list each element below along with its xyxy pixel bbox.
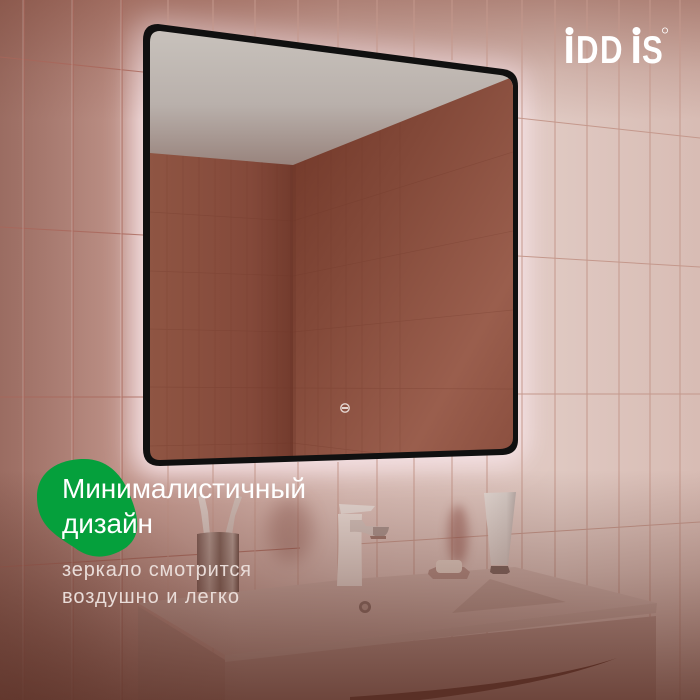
toothbrushes and cup xyxy=(197,494,242,592)
mirror xyxy=(143,24,518,466)
mirror reflection xyxy=(150,25,515,465)
cup xyxy=(197,532,239,592)
right toothbrush xyxy=(225,495,242,535)
logo: iddis: D xyxy=(576,29,599,72)
bottom shading xyxy=(0,470,700,700)
subheading xyxy=(62,559,251,608)
counter top xyxy=(138,567,657,655)
faucet xyxy=(337,504,389,586)
heading: дизайн xyxy=(62,508,153,539)
shadow behind cup xyxy=(268,498,312,562)
logo: iddis xyxy=(564,27,668,72)
logo: iddis: S xyxy=(642,29,663,72)
heading xyxy=(62,473,306,539)
logo: iddis: D xyxy=(600,29,623,72)
green blob xyxy=(37,459,137,557)
subheading: воздушно и легко xyxy=(62,586,239,608)
subheading: зеркало смотрится xyxy=(62,559,251,581)
logo: iddis: I xyxy=(630,29,642,72)
shadow behind tube xyxy=(448,505,468,565)
mirror frame xyxy=(143,24,518,466)
backlight glow around mirror xyxy=(143,24,518,466)
wall shading: top xyxy=(0,0,700,120)
logo: iddis: I xyxy=(564,29,575,72)
drawer cut xyxy=(350,658,617,700)
cabinet side xyxy=(138,606,225,700)
bottom-left shading xyxy=(0,470,250,700)
touch button xyxy=(341,404,349,412)
basin reflection xyxy=(452,579,566,613)
cabinet xyxy=(138,606,656,700)
heading: Минималистичный xyxy=(62,473,306,504)
cream tube xyxy=(484,492,516,574)
left toothbrush xyxy=(198,494,210,535)
drain xyxy=(359,601,371,613)
counter front edge xyxy=(225,603,657,662)
vanity unit xyxy=(138,567,657,700)
soap dish with soap xyxy=(428,560,470,579)
wall shading: left xyxy=(0,0,130,700)
